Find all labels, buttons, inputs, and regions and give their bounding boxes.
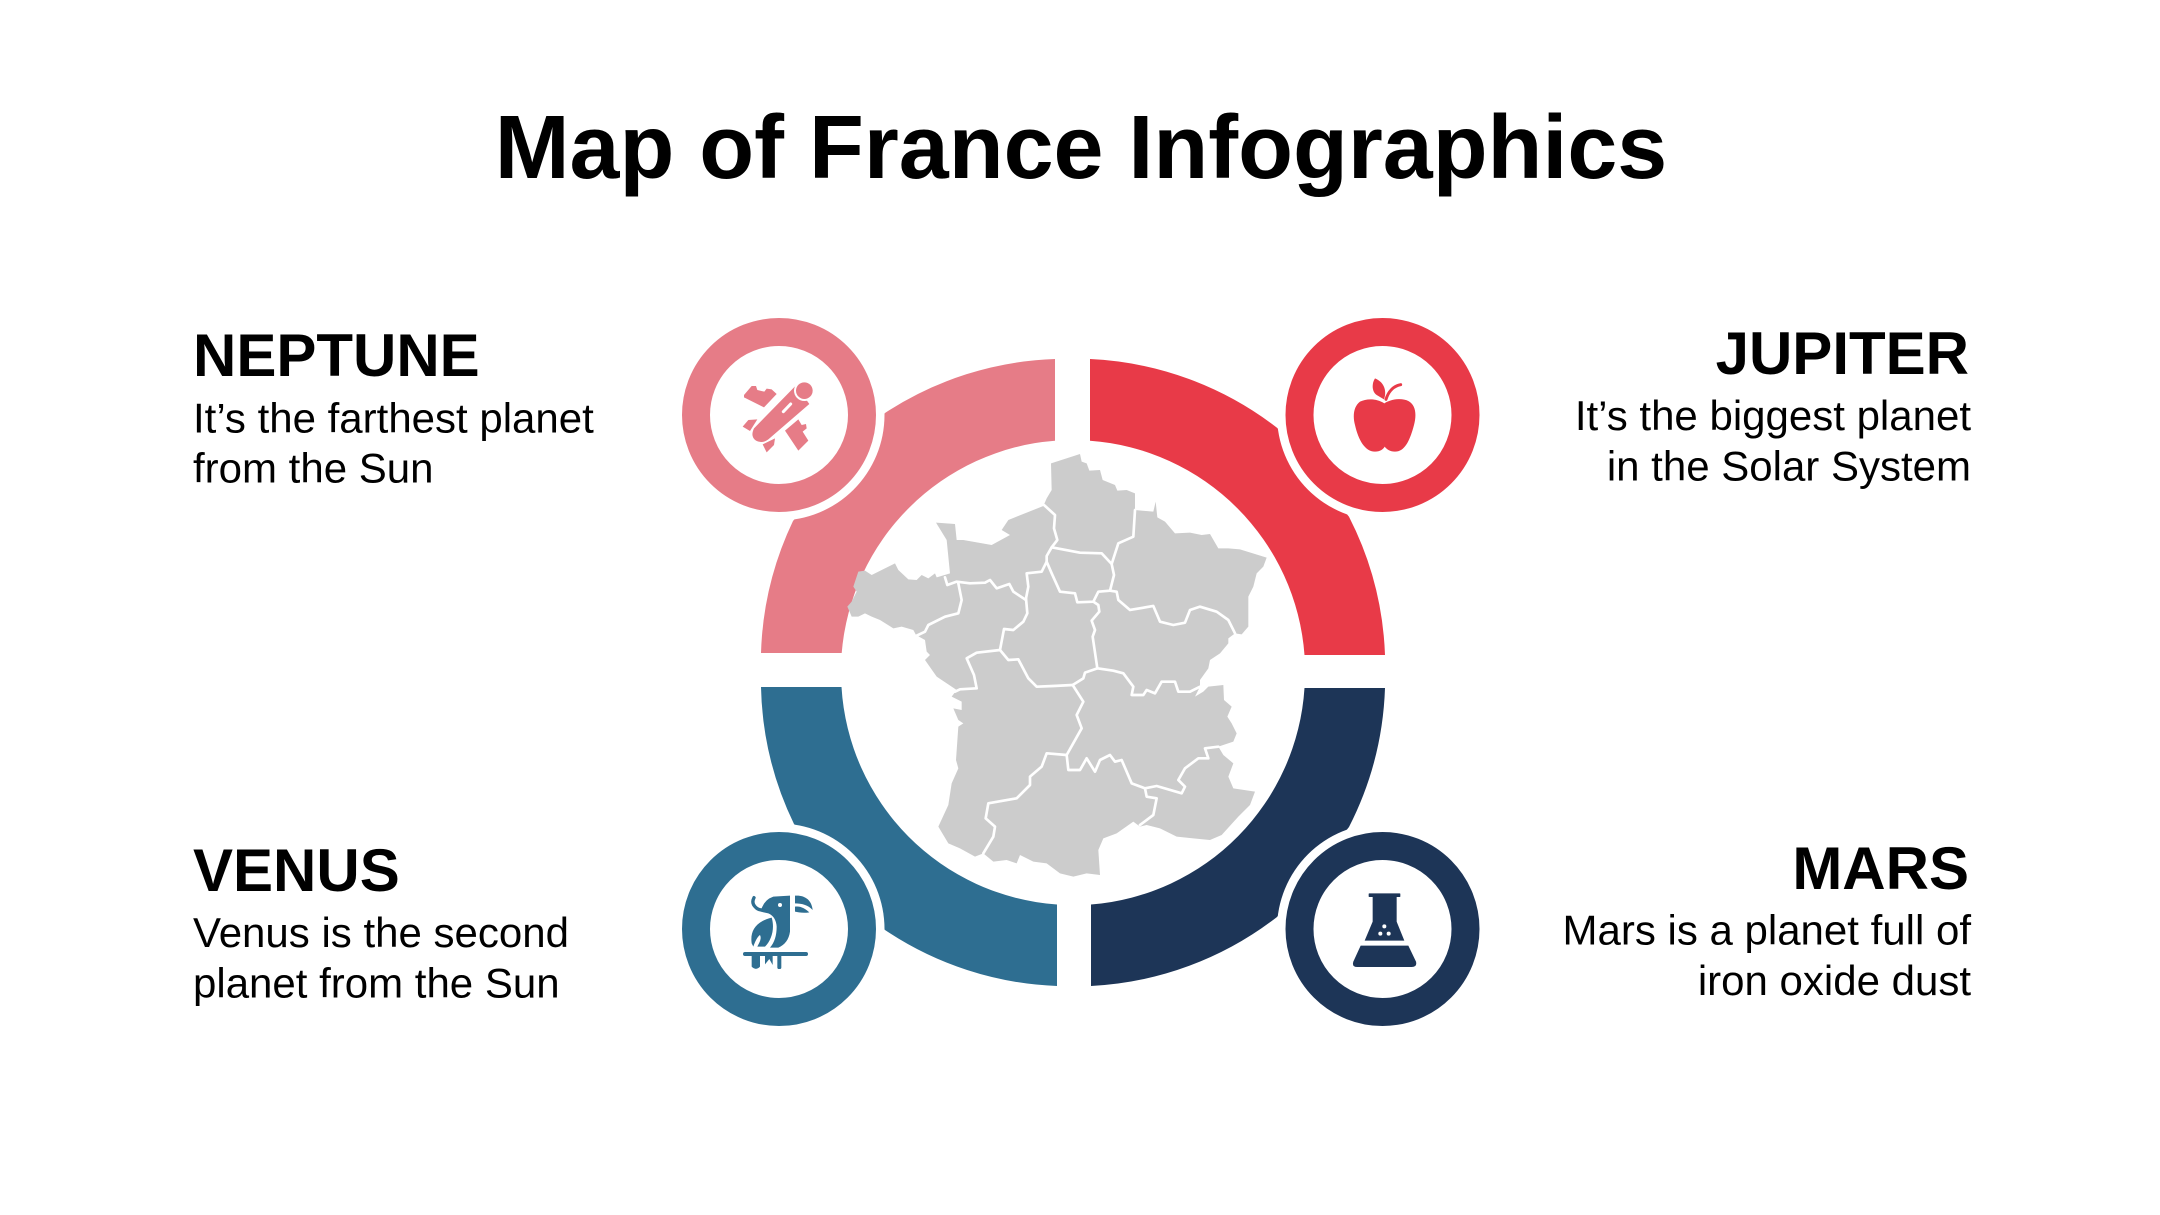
ring segment: Venus — [761, 687, 1057, 986]
text block: Mars: iron oxide dust — [1698, 957, 1971, 1004]
text block: Jupiter: JUPITER — [1716, 320, 1969, 387]
map outline — [847, 454, 1267, 877]
text block: Neptune: NEPTUNE — [193, 322, 480, 389]
icon badge: flask — [1300, 846, 1466, 1012]
icon badge: parrot — [696, 846, 862, 1012]
text block: Mars: Mars is a planet full of — [1562, 906, 1971, 954]
text block: Venus — [193, 837, 569, 1006]
ring segment: Mars — [1091, 688, 1385, 986]
icon badge: apple — [1300, 332, 1466, 498]
text block: Neptune: from the Sun — [193, 444, 433, 492]
title: Map of France Infographics — [495, 98, 1667, 198]
text block: Jupiter: in the Solar System — [1607, 442, 1971, 490]
map of France — [847, 454, 1267, 877]
text block: Venus: VENUS — [193, 837, 400, 904]
icon badge: airplane — [696, 332, 862, 498]
text block: Venus: planet from the Sun — [193, 960, 560, 1006]
text block: Neptune: It’s the farthest planet — [193, 394, 594, 442]
text block: Jupiter: It’s the biggest planet — [1575, 392, 1971, 439]
ring segment: Jupiter — [1090, 359, 1385, 655]
text block: Mars — [1562, 835, 1971, 1004]
text block: Neptune — [193, 322, 594, 492]
text block: Jupiter — [1575, 320, 1971, 490]
panel: ring diagram — [674, 310, 1488, 1034]
text block: Venus: Venus is the second — [193, 909, 569, 956]
region borders — [916, 505, 1235, 853]
ring segment: Neptune — [761, 359, 1055, 653]
text block: Mars: MARS — [1792, 835, 1969, 902]
